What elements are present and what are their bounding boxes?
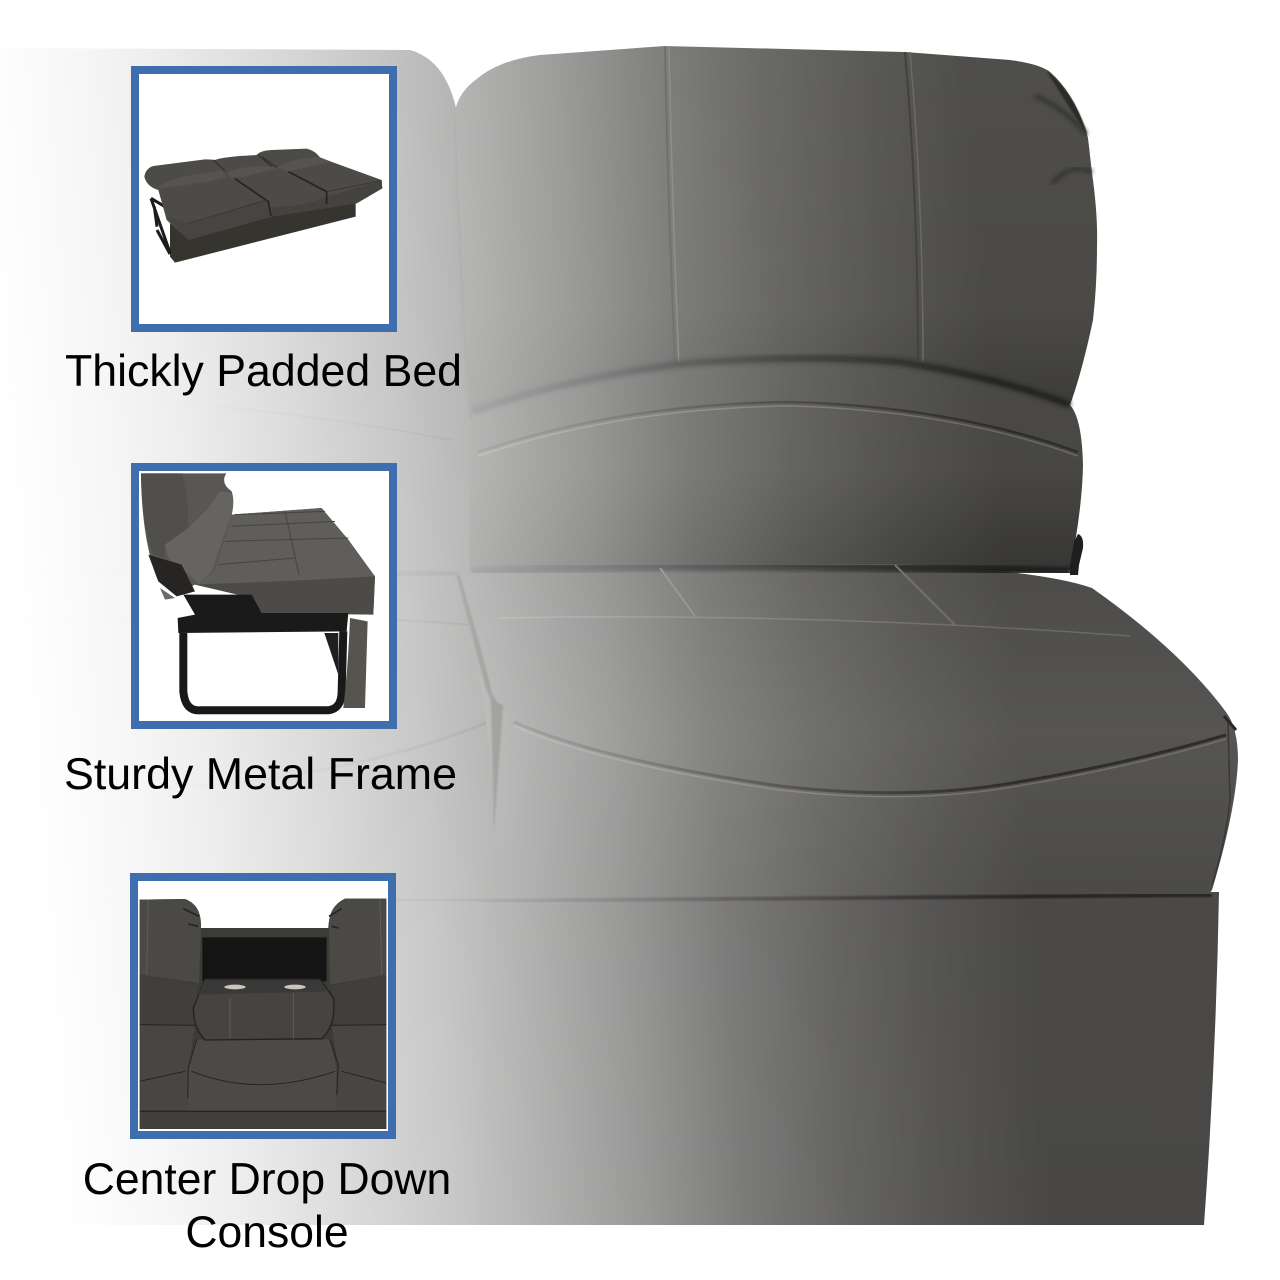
icon: sofa side view on metal frame: [141, 473, 375, 710]
icon: sofa with drop down console: [140, 899, 386, 1129]
chair lower base: [474, 892, 1219, 1225]
heading: center drop down console: Center Drop Down: [83, 1155, 451, 1204]
panel: thickly padded bed inset: [135, 70, 393, 328]
inset frame: [135, 70, 393, 328]
inset frame: [134, 877, 392, 1135]
backrest stitching and creases: [472, 47, 1092, 572]
heading: thickly padded bed: Thickly Padded Bed: [65, 347, 462, 396]
icon: sofa folded flat as bed: [144, 149, 382, 263]
heading: sturdy metal frame: Sturdy Metal Frame: [64, 750, 457, 799]
chair seat cushion: [458, 564, 1238, 903]
ghost chair section on the left: [0, 48, 510, 1225]
chair backrest upper cushion: [455, 46, 1097, 420]
seat stitching and creases: [458, 565, 1236, 901]
inset frame: [135, 467, 393, 725]
panel: center drop down console inset: [134, 877, 392, 1135]
panel: sturdy metal frame inset: [135, 467, 393, 725]
heading: console line two: Console: [185, 1208, 349, 1257]
chair backrest lower cushion: [469, 358, 1083, 580]
backrest bracket: [1070, 534, 1083, 575]
